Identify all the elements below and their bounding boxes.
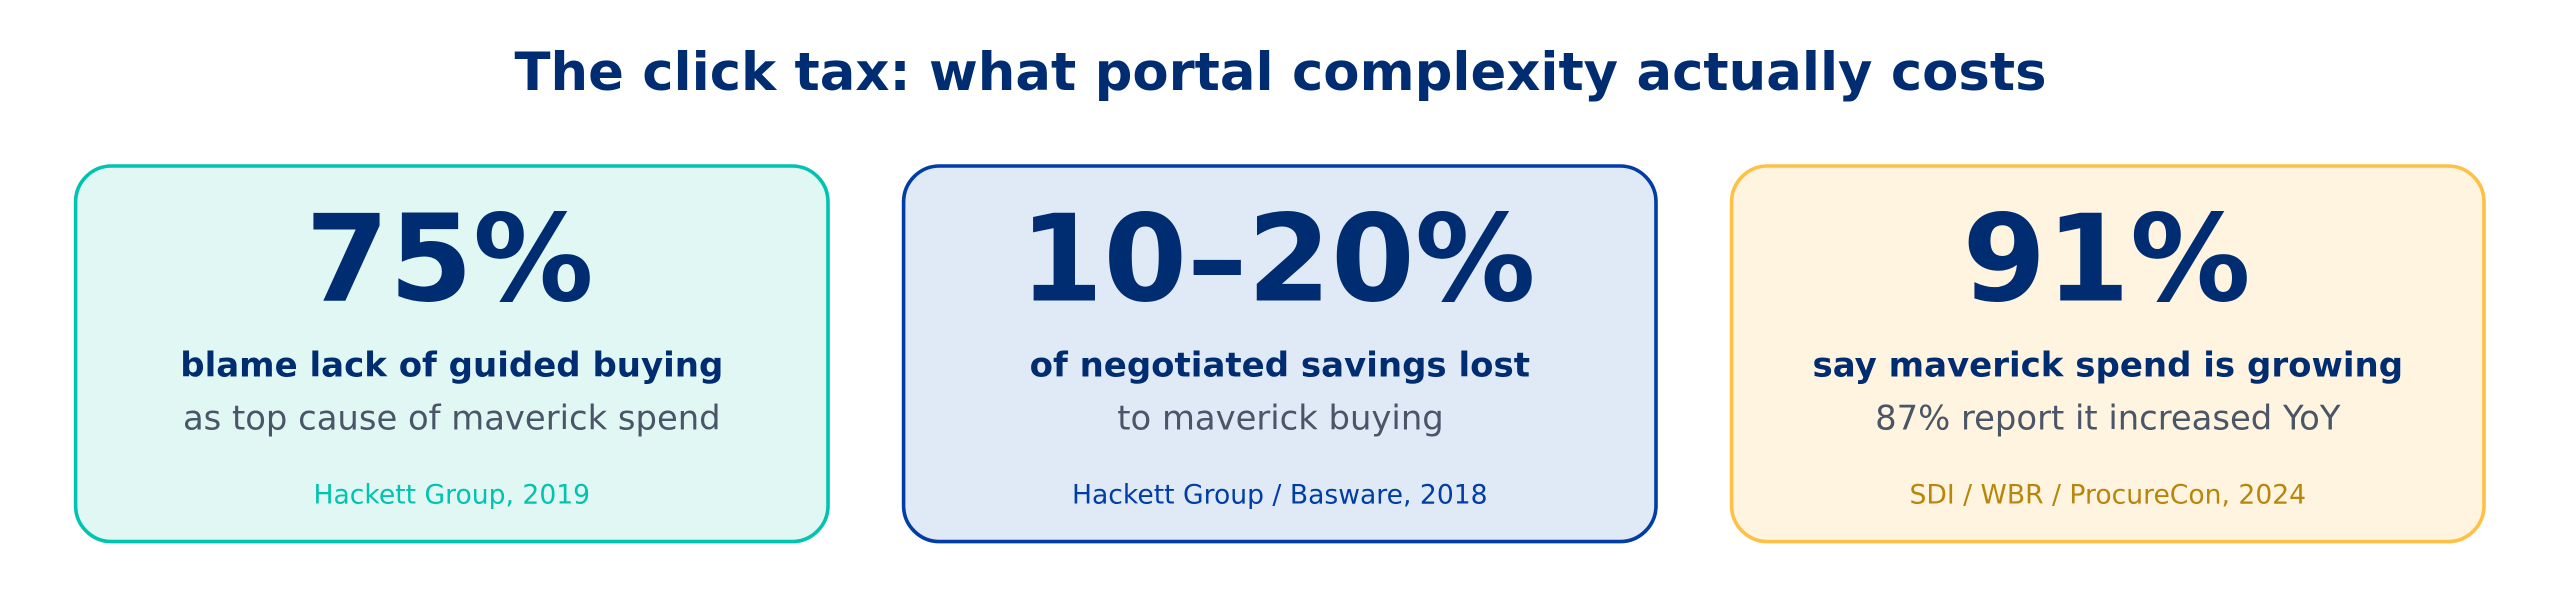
- panel: 75% stat: [76, 166, 828, 542]
- source: SDI / WBR / ProcureCon, 2024: [1909, 480, 2306, 510]
- big number: 75%: 75%: [305, 190, 594, 330]
- panel: 10-20% stat: [904, 166, 1656, 542]
- bold statement: say maverick spend is growing: [1813, 346, 2403, 386]
- supporting text: 87% report it increased YoY: [1875, 398, 2341, 438]
- supporting text: to maverick buying: [1117, 398, 1444, 438]
- source: Hackett Group, 2019: [314, 480, 590, 510]
- source: Hackett Group / Basware, 2018: [1072, 480, 1488, 510]
- big number: 91%: 91%: [1962, 190, 2251, 330]
- title: The click tax: what portal complexity actually costs: [514, 42, 2047, 103]
- big number: 10–20%: 10–20%: [1020, 190, 1535, 330]
- supporting text: as top cause of maverick spend: [183, 398, 721, 438]
- bold statement: blame lack of guided buying: [180, 346, 723, 386]
- bold statement: of negotiated savings lost: [1030, 346, 1530, 386]
- panel: 91% stat: [1732, 166, 2484, 542]
